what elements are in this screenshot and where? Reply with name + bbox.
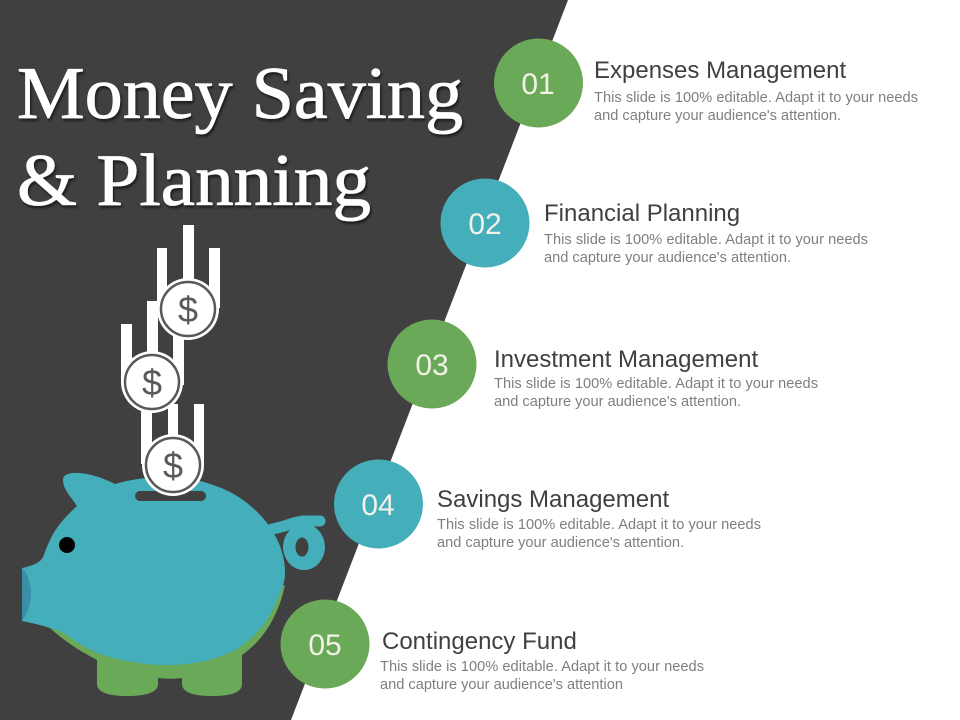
item 04: and capture your audience's attention.: [437, 535, 684, 551]
dark diagonal background panel: [0, 0, 568, 720]
falling coin 2 streaks: [121, 301, 184, 385]
item 05: [280, 600, 704, 693]
pig snout: [22, 568, 31, 621]
coin slot: [135, 491, 206, 501]
piggy bank icon: [22, 473, 325, 696]
coin 3: $: [163, 445, 183, 486]
item 05: and capture your audience's attention: [380, 677, 623, 693]
coin 2: [121, 351, 183, 413]
pig body: [22, 473, 285, 665]
item 03: 03: [415, 349, 449, 382]
coin 3: [142, 434, 204, 496]
pig eye: [59, 537, 75, 553]
item 04: [334, 460, 761, 551]
falling coin 3 streaks: [141, 404, 204, 464]
item 04: 04: [361, 489, 395, 522]
item 04: Savings Management: [437, 486, 669, 513]
item 01: [494, 38, 918, 128]
item 05: Contingency Fund: [382, 628, 577, 655]
title: Money Saving: [17, 53, 463, 135]
item 03: [388, 320, 818, 410]
item 03: This slide is 100% editable. Adapt it to your needs: [494, 376, 818, 392]
item 01: Expenses Management: [594, 57, 846, 84]
pig legs and belly: [50, 585, 285, 696]
coin 2: $: [142, 362, 162, 403]
item 01: This slide is 100% editable. Adapt it to your needs: [594, 90, 918, 106]
title: [17, 53, 463, 222]
item 05: 05: [308, 629, 342, 662]
item 05: This slide is 100% editable. Adapt it to your needs: [380, 659, 704, 675]
title: & Planning: [17, 140, 371, 222]
item 03: and capture your audience's attention.: [494, 394, 741, 410]
item 01: and capture your audience's attention.: [594, 108, 841, 124]
item 03: Investment Management: [494, 346, 758, 373]
item 04: This slide is 100% editable. Adapt it to your needs: [437, 517, 761, 533]
item 01: 01: [521, 68, 555, 101]
pig tail: [272, 521, 325, 570]
item 02: 02: [468, 208, 502, 241]
coin 1: $: [178, 289, 198, 330]
item 02: [440, 178, 868, 268]
item 02: This slide is 100% editable. Adapt it to your needs: [544, 232, 868, 248]
falling coin 1 streaks: [157, 225, 220, 308]
item 02: Financial Planning: [544, 200, 740, 227]
item 02: and capture your audience's attention.: [544, 250, 791, 266]
coin 1: [157, 278, 219, 340]
